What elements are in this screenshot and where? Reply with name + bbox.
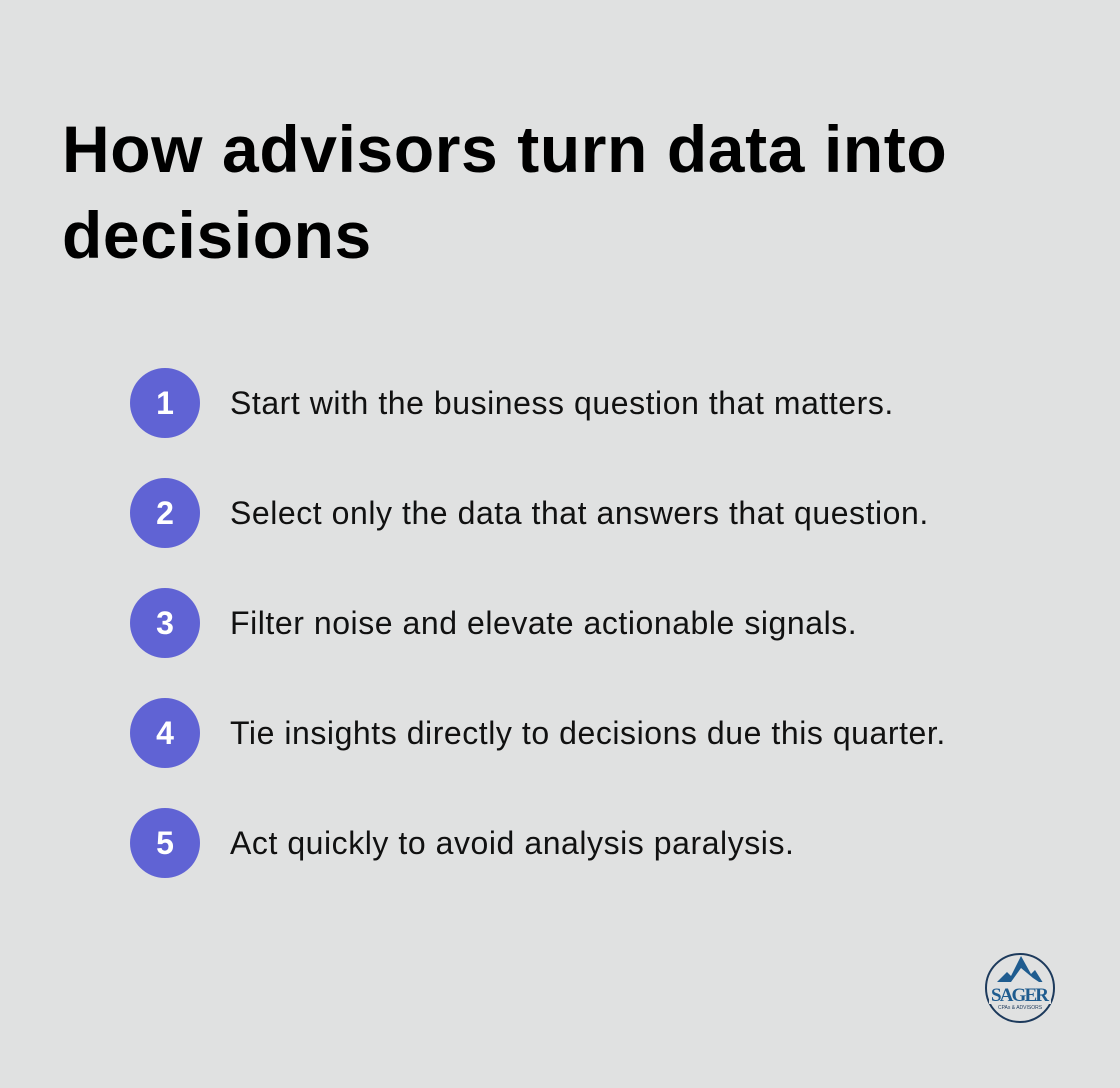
step 4 — [130, 698, 946, 768]
logo — [985, 953, 1055, 1023]
step 1: Start with the business question that matters. — [230, 385, 894, 421]
title: decisions — [62, 198, 372, 272]
title — [62, 112, 947, 272]
step 1: 1 — [156, 385, 174, 421]
step 2: Select only the data that answers that question. — [230, 495, 929, 531]
step 2 — [130, 478, 929, 548]
title: How advisors turn data into — [62, 112, 947, 186]
step 4: 4 — [156, 715, 174, 751]
step 5: Act quickly to avoid analysis paralysis. — [230, 825, 794, 861]
step 3 — [130, 588, 857, 658]
logo: SAGER — [991, 985, 1049, 1006]
step 1 — [130, 368, 894, 438]
step 5 — [130, 808, 794, 878]
step 2: 2 — [156, 495, 174, 531]
step 3: Filter noise and elevate actionable signals. — [230, 605, 857, 641]
step 5: 5 — [156, 825, 174, 861]
step 3: 3 — [156, 605, 174, 641]
logo: CPAs & ADVISORS — [998, 1005, 1043, 1011]
step 4: Tie insights directly to decisions due this quarter. — [230, 715, 946, 751]
